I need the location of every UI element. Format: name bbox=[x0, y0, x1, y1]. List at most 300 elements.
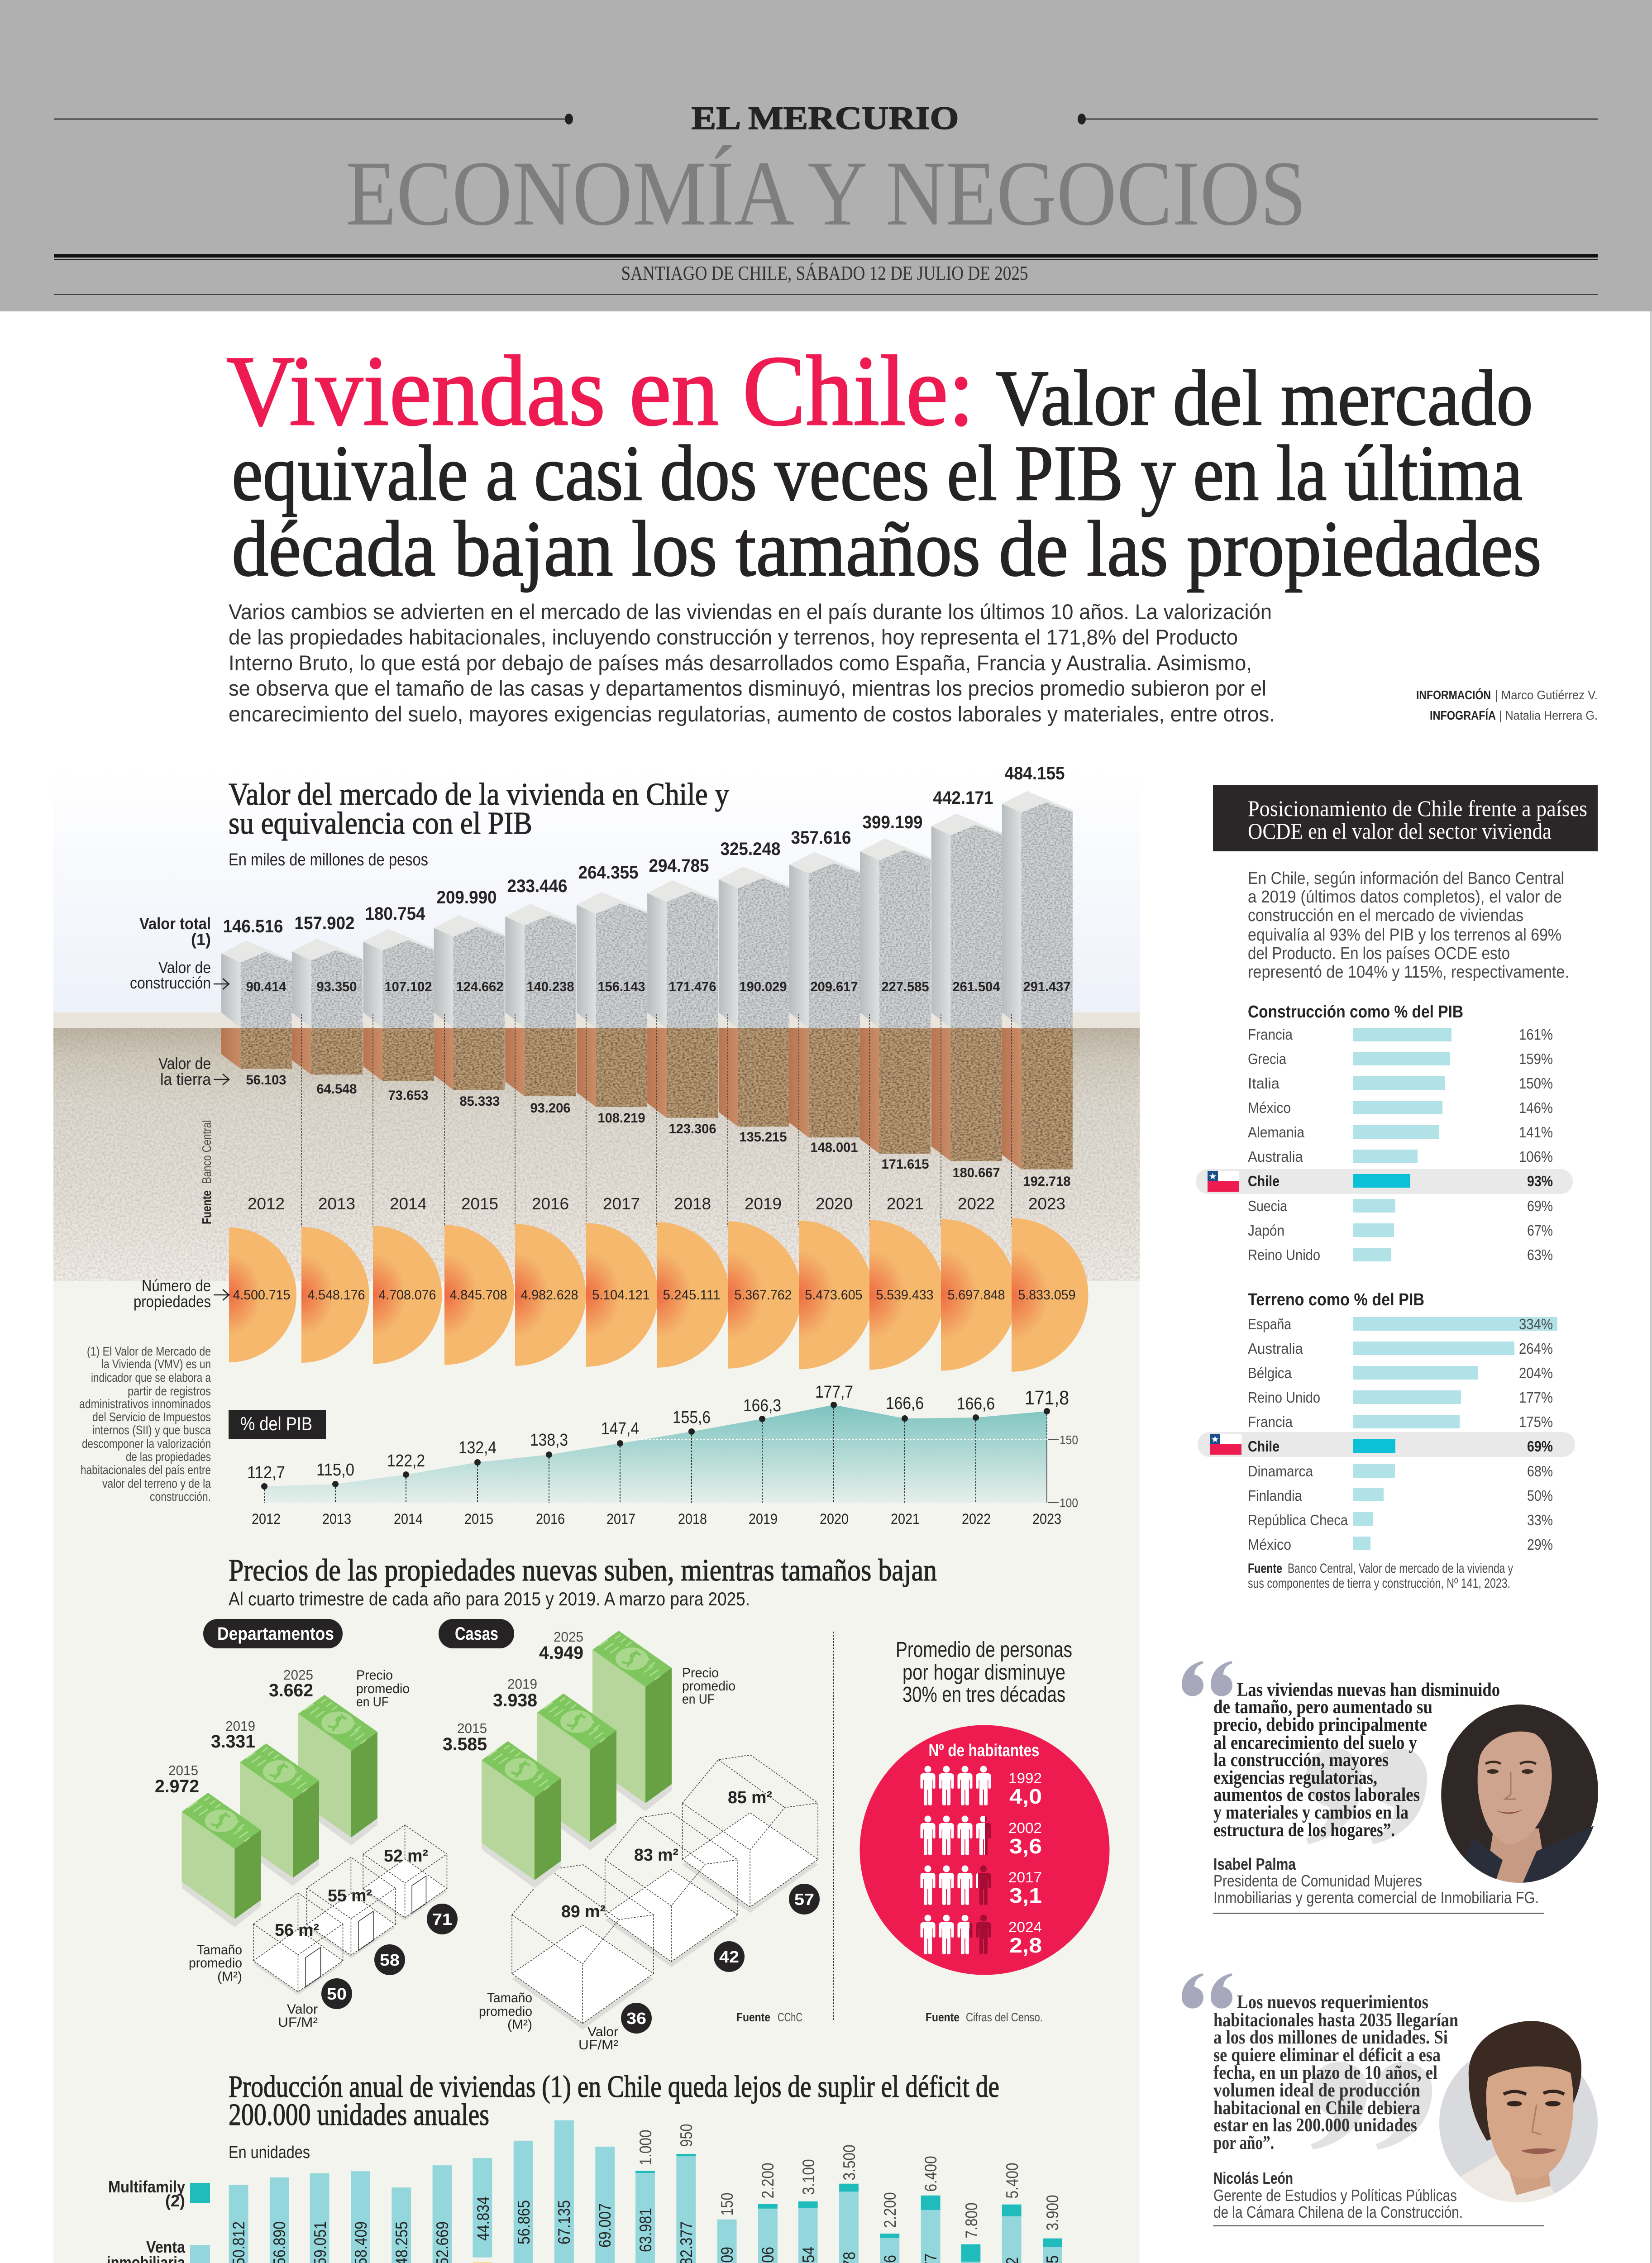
section title: Producción anual de viviendas (1) en Chile queda lejos de suplir el déficit de bbox=[229, 2069, 999, 2104]
quote author: Gerente de Estudios y Políticas Públicas bbox=[1213, 2186, 1457, 2205]
footnote: la Vivienda (VMV) es un bbox=[101, 1357, 211, 1371]
apartment price stacks bbox=[182, 1695, 377, 1927]
property counts: 4.982.628 bbox=[520, 1288, 578, 1303]
year labels: 2023 bbox=[1028, 1194, 1065, 1213]
construction values: 291.437 bbox=[1023, 979, 1071, 994]
bar list: land as % of GDP: Dinamarca bbox=[1248, 1463, 1313, 1480]
people 1992 bbox=[921, 1766, 991, 1805]
axis years: 2021 bbox=[891, 1511, 920, 1527]
total values: 264.355 bbox=[578, 863, 638, 883]
quote text: se quiere eliminar el déficit a esa bbox=[1213, 2045, 1441, 2066]
portrait: Isabel Palma bbox=[1441, 1704, 1598, 1887]
bar list: land as % of GDP: Reino Unido bbox=[1248, 1389, 1320, 1406]
data labels: 177,7 bbox=[815, 1383, 853, 1402]
people 2017 bbox=[921, 1866, 991, 1905]
multifamily values: 3.100 bbox=[799, 2159, 818, 2195]
chart: annual housing production bbox=[80, 2069, 1063, 2263]
multifamily values: 150 bbox=[718, 2192, 736, 2216]
total values: 484.155 bbox=[1005, 764, 1065, 783]
property counts: 5.245.111 bbox=[663, 1288, 721, 1303]
year labels: 2019 bbox=[745, 1194, 782, 1213]
panel intro text: del Producto. En los países OCDE esto bbox=[1248, 944, 1510, 963]
row labels: Valor de bbox=[158, 958, 211, 977]
section subtitle: Al cuarto trimestre de cada año para 2015 y 2019. A marzo para 2025. bbox=[229, 1588, 750, 1609]
household size circle: Nº de habitantes bbox=[929, 1741, 1039, 1760]
data labels: 138,3 bbox=[530, 1431, 568, 1450]
land values: 180.667 bbox=[952, 1165, 1000, 1180]
panel source: sus componentes de tierra y construcción, Nº 141, 2023. bbox=[1248, 1576, 1510, 1591]
land values: 56.103 bbox=[246, 1073, 286, 1088]
bar list: construction as % of GDP: Italia bbox=[1248, 1075, 1280, 1092]
quote text: volumen ideal de producción bbox=[1213, 2080, 1420, 2101]
household values: 3,6 bbox=[1009, 1834, 1042, 1858]
multifamily values: 3.900 bbox=[1043, 2195, 1062, 2230]
date line: SANTIAGO DE CHILE, SÁBADO 12 DE JULIO DE 2025 bbox=[621, 262, 1028, 284]
bar list: land as % of GDP: 334% bbox=[1519, 1316, 1553, 1332]
pill: houses: Casas bbox=[455, 1624, 498, 1644]
bar list: land as % of GDP: Francia bbox=[1248, 1413, 1293, 1430]
callout labels: Tamaño bbox=[197, 1943, 242, 1957]
row labels: Valor de bbox=[158, 1054, 211, 1073]
UF per m2 badges: 71 bbox=[432, 1910, 452, 1929]
price labels: 2015 bbox=[168, 1762, 198, 1778]
intro paragraph: de las propiedades habitacionales, incluyendo construcción y terrenos, hoy representa el 171,8% del Producto bbox=[229, 625, 1238, 649]
bar list: land as % of GDP: Bélgica bbox=[1248, 1365, 1292, 1381]
section title: 200.000 unidades anuales bbox=[229, 2097, 489, 2132]
property counts: 4.845.708 bbox=[450, 1288, 507, 1303]
quote text: por año”. bbox=[1213, 2133, 1274, 2153]
bar list: construction as % of GDP: 67% bbox=[1527, 1222, 1553, 1239]
source: Banco Central bbox=[200, 1120, 214, 1184]
main title: década bajan los tamaños de las propiedades bbox=[232, 505, 1542, 592]
quote text: habitacional en Chile debiera bbox=[1213, 2098, 1420, 2119]
household values: 1992 bbox=[1008, 1770, 1042, 1786]
bars: construction and land bbox=[221, 791, 1073, 1170]
price labels: 2015 bbox=[457, 1720, 487, 1736]
main title bbox=[226, 335, 1542, 592]
intro paragraph: encarecimiento del suelo, mayores exigencias regulatorias, aumento de costos laborales y materiales, entre otros. bbox=[229, 702, 1275, 726]
construction values: 124.662 bbox=[456, 979, 503, 994]
data labels: 147,4 bbox=[601, 1419, 639, 1438]
size labels: 83 m² bbox=[634, 1846, 678, 1865]
year labels: 2021 bbox=[887, 1194, 924, 1213]
legend: (2) bbox=[165, 2191, 185, 2210]
dashed year guides bbox=[301, 1014, 1012, 1227]
axis years: 2014 bbox=[394, 1511, 423, 1527]
callout labels: en UF bbox=[682, 1692, 715, 1707]
footnote: construcción. bbox=[150, 1490, 211, 1504]
quote text bbox=[1213, 1992, 1458, 2153]
sale values: 44.834 bbox=[474, 2196, 492, 2241]
bar list: construction as % of GDP: 150% bbox=[1519, 1075, 1553, 1092]
portrait: Nicolás León bbox=[1439, 2021, 1598, 2218]
bar list: construction as % of GDP: Japón bbox=[1248, 1222, 1284, 1239]
source bbox=[200, 1120, 214, 1224]
intro paragraph: se observa que el tamaño de las casas y departamentos disminuyó, mientras los precios promedio subieron por el bbox=[229, 676, 1266, 700]
total values: 233.446 bbox=[507, 876, 568, 896]
year labels: 2017 bbox=[603, 1194, 640, 1213]
quote: Isabel Palma bbox=[1182, 1661, 1598, 1913]
year labels: 2016 bbox=[532, 1194, 569, 1213]
household values bbox=[1008, 1770, 1042, 1957]
land values: 123.306 bbox=[669, 1122, 716, 1136]
UF per m2 badges: 58 bbox=[380, 1951, 400, 1969]
bar list: land as % of GDP: 29% bbox=[1527, 1536, 1553, 1553]
source: census: Fuente bbox=[926, 2010, 960, 2024]
quote: Nicolás León bbox=[1182, 1973, 1598, 2226]
row labels: construcción bbox=[130, 974, 211, 992]
construction values: 171.476 bbox=[669, 979, 716, 994]
footnote: del Servicio de Impuestos bbox=[92, 1410, 211, 1424]
total values: 146.516 bbox=[223, 917, 283, 936]
land values: 192.718 bbox=[1023, 1174, 1071, 1189]
construction values: 93.350 bbox=[317, 979, 357, 994]
callout labels: UF/M² bbox=[578, 2038, 618, 2053]
property counts: 5.367.762 bbox=[734, 1288, 792, 1303]
size labels: 52 m² bbox=[384, 1847, 428, 1866]
bar list: land as % of GDP: México bbox=[1248, 1536, 1291, 1553]
axis years: 2015 bbox=[464, 1511, 493, 1527]
panel heading: OCDE en el valor del sector vivienda bbox=[1248, 818, 1552, 844]
bar list: land as % of GDP: Finlandia bbox=[1248, 1487, 1303, 1504]
year labels: 2022 bbox=[958, 1194, 995, 1213]
year labels: 2015 bbox=[461, 1194, 498, 1213]
footnote: descomponer la valorización bbox=[82, 1437, 211, 1451]
footnote: partir de registros bbox=[128, 1384, 211, 1398]
property counts: 5.833.059 bbox=[1018, 1288, 1075, 1303]
arrows bbox=[214, 979, 229, 1300]
pill: apartments: Departamentos bbox=[217, 1624, 334, 1644]
footnote: habitacionales del país entre bbox=[81, 1463, 211, 1477]
axis years: 2013 bbox=[322, 1511, 351, 1527]
callout labels: Precio bbox=[356, 1668, 393, 1683]
construction values: 156.143 bbox=[597, 979, 645, 994]
credits: INFORMACIÓN bbox=[1416, 688, 1491, 702]
multifamily values: 2.200 bbox=[881, 2192, 899, 2228]
backdrop: horizon band bbox=[53, 1012, 1140, 1028]
bar list: construction as % of GDP: Suecia bbox=[1248, 1198, 1288, 1214]
multifamily values bbox=[636, 2124, 1062, 2239]
quote text: habitacionales hasta 2035 llegarían bbox=[1213, 2010, 1458, 2031]
UF per m2 badges: 57 bbox=[794, 1890, 814, 1909]
unit note: En unidades bbox=[229, 2143, 310, 2162]
data points bbox=[261, 1402, 1050, 1490]
price labels: 3.662 bbox=[269, 1681, 313, 1700]
price labels: 2025 bbox=[283, 1667, 313, 1683]
bar list: construction as % of GDP: 63% bbox=[1527, 1246, 1553, 1263]
size labels: 56 m² bbox=[275, 1921, 319, 1940]
source: prices bbox=[736, 2010, 802, 2024]
axis years: 2018 bbox=[678, 1511, 707, 1527]
quote author: Nicolás León bbox=[1213, 2169, 1293, 2187]
construction values bbox=[246, 979, 1071, 994]
unit note: En miles de millones de pesos bbox=[229, 850, 428, 869]
household size heading: Promedio de personas bbox=[896, 1638, 1072, 1662]
bar list: land as % of GDP: España bbox=[1248, 1316, 1292, 1332]
property counts: 4.708.076 bbox=[378, 1288, 436, 1303]
household values: 3,1 bbox=[1009, 1884, 1042, 1907]
bar list: construction as % of GDP: 159% bbox=[1519, 1050, 1553, 1067]
source: census bbox=[926, 2010, 1043, 2024]
footnote: valor del terreno y de la bbox=[102, 1476, 211, 1490]
axis bbox=[1047, 1433, 1078, 1510]
year labels: 2018 bbox=[674, 1194, 711, 1213]
household size heading: por hogar disminuye bbox=[902, 1661, 1065, 1685]
sale values bbox=[229, 2196, 1062, 2263]
price labels: 4.949 bbox=[539, 1643, 583, 1663]
bar list: land as % of GDP: República Checa bbox=[1248, 1512, 1348, 1528]
chart: % of GDP bbox=[229, 1383, 1078, 1527]
callout labels: Valor bbox=[587, 2024, 618, 2039]
bar list: construction as % of GDP: 93% bbox=[1527, 1173, 1553, 1189]
data labels bbox=[247, 1383, 1069, 1482]
footnote: internos (SII) y que busca bbox=[92, 1423, 211, 1437]
pill: apartments bbox=[203, 1619, 343, 1648]
source: prices: CChC bbox=[778, 2010, 802, 2024]
bar list: land as % of GDP: 264% bbox=[1519, 1340, 1553, 1357]
intro paragraph: Interno Bruto, lo que está por debajo de países más desarrollados como España, Francia y Australia. Asimismo, bbox=[229, 651, 1252, 675]
bar list: construction as % of GDP: Francia bbox=[1248, 1026, 1293, 1043]
backdrop: ground bbox=[53, 1028, 1140, 1281]
data labels: 122,2 bbox=[387, 1451, 425, 1470]
price labels bbox=[155, 1629, 583, 1796]
household size circle bbox=[860, 1725, 1110, 1975]
bar list: construction as % of GDP: Alemania bbox=[1248, 1124, 1305, 1141]
bar list: construction as % of GDP: Grecia bbox=[1248, 1050, 1287, 1067]
quote author bbox=[1213, 2169, 1463, 2221]
property counts: 5.697.848 bbox=[948, 1288, 1005, 1303]
construction values: 227.585 bbox=[882, 979, 929, 994]
sale values: 69.007 bbox=[596, 2203, 614, 2248]
quote text: estructura de los hogares”. bbox=[1213, 1820, 1395, 1841]
house size boxes bbox=[512, 1755, 818, 2029]
bar list: construction as % of GDP: 106% bbox=[1519, 1148, 1553, 1165]
section title: Precios de las propiedades nuevas suben, mientras tamaños bajan bbox=[229, 1553, 937, 1587]
data labels: 155,6 bbox=[673, 1408, 711, 1427]
total values bbox=[223, 764, 1065, 936]
quote author: de la Cámara Chilena de la Construcción. bbox=[1213, 2203, 1463, 2221]
multifamily values: 3.500 bbox=[840, 2144, 859, 2181]
footnote: administrativos innominados bbox=[79, 1397, 211, 1411]
property counts: 5.104.121 bbox=[592, 1288, 650, 1303]
footnote: de las propiedades bbox=[126, 1450, 211, 1464]
quote author: Isabel Palma bbox=[1213, 1855, 1296, 1873]
panel source bbox=[1248, 1561, 1513, 1591]
data labels: 132,4 bbox=[458, 1438, 497, 1457]
row labels: propiedades bbox=[134, 1292, 211, 1311]
footnote: indicador que se elabora a bbox=[91, 1370, 211, 1385]
section title bbox=[229, 2069, 999, 2132]
multifamily values: 950 bbox=[677, 2124, 696, 2147]
panel intro text bbox=[1248, 869, 1569, 982]
callout labels: UF/M² bbox=[278, 2015, 318, 2030]
construction values: 209.617 bbox=[810, 979, 858, 994]
main title: Viviendas en Chile: bbox=[226, 335, 974, 447]
price labels: 2019 bbox=[225, 1718, 255, 1734]
UF per m2 badges: 50 bbox=[327, 1985, 347, 2003]
credits: | Marco Gutiérrez V. bbox=[1495, 688, 1598, 702]
row labels: Valor total bbox=[139, 914, 211, 933]
quote text: estar en las 200.000 unidades bbox=[1213, 2115, 1417, 2136]
panel heading bbox=[1213, 785, 1598, 851]
household values: 2017 bbox=[1008, 1869, 1042, 1886]
row labels: la tierra bbox=[160, 1070, 211, 1089]
bar list: land as % of GDP: Australia bbox=[1248, 1340, 1303, 1357]
panel intro text: En Chile, según información del Banco Central bbox=[1248, 869, 1564, 888]
callout labels: Precio bbox=[682, 1666, 719, 1681]
property counts: 5.539.433 bbox=[876, 1288, 933, 1303]
backdrop: sky bbox=[53, 769, 1140, 1012]
quote text: precio, debido principalmente bbox=[1213, 1714, 1427, 1735]
bar list: land as % of GDP: 50% bbox=[1527, 1487, 1553, 1504]
data labels: 171,8 bbox=[1025, 1387, 1069, 1409]
total values: 399.199 bbox=[863, 812, 922, 832]
land values: 148.001 bbox=[810, 1140, 858, 1155]
year labels: 2012 bbox=[248, 1194, 285, 1213]
quote text: y materiales y cambios en la bbox=[1213, 1802, 1408, 1823]
axis years: 2020 bbox=[820, 1511, 849, 1527]
multifamily values: 1.000 bbox=[636, 2130, 655, 2165]
bar list: land as % of GDP bbox=[1198, 1290, 1575, 1553]
chart title: su equivalencia con el PIB bbox=[229, 806, 532, 841]
callout labels: promedio bbox=[356, 1681, 410, 1696]
bar list: land as % of GDP: 69% bbox=[1527, 1438, 1553, 1455]
sale values: 56.865 bbox=[515, 2200, 533, 2244]
total values: 442.171 bbox=[933, 788, 993, 808]
bar list: land as % of GDP: Chile bbox=[1248, 1438, 1280, 1455]
data labels: 166,6 bbox=[957, 1394, 995, 1413]
callout labels: Tamaño bbox=[487, 1991, 532, 2005]
price labels: 2.972 bbox=[155, 1776, 199, 1796]
callout labels: (M²) bbox=[507, 2017, 532, 2032]
axis years: 2017 bbox=[606, 1511, 635, 1527]
total values: 209.990 bbox=[436, 888, 497, 907]
credits bbox=[1416, 688, 1598, 722]
callout labels bbox=[189, 1666, 735, 2053]
masthead band bbox=[0, 0, 1652, 311]
people 2024 bbox=[921, 1914, 991, 1954]
total values: 180.754 bbox=[365, 904, 425, 924]
chart title: Valor del mercado de la vivienda en Chile y bbox=[229, 777, 729, 812]
household values: 2,8 bbox=[1009, 1934, 1042, 1957]
newspaper name: EL MERCURIO bbox=[692, 100, 959, 136]
main title: Valor del mercado bbox=[996, 354, 1533, 442]
total values: 157.902 bbox=[294, 913, 355, 933]
quote text: Las viviendas nuevas han disminuido bbox=[1237, 1680, 1500, 1700]
total values: 357.616 bbox=[791, 828, 851, 848]
panel source: Fuente bbox=[1248, 1561, 1282, 1576]
UF per m2 badges: 42 bbox=[719, 1948, 739, 1966]
price labels: 2025 bbox=[554, 1629, 583, 1645]
total values: 325.248 bbox=[721, 839, 780, 859]
bar list: construction as % of GDP: 146% bbox=[1519, 1099, 1553, 1116]
bar list: construction as % of GDP: Reino Unido bbox=[1248, 1246, 1320, 1263]
land values: 93.206 bbox=[530, 1101, 570, 1116]
quote text: al encarecimiento del suelo y bbox=[1213, 1733, 1417, 1753]
credits: | Natalia Herrera G. bbox=[1499, 708, 1598, 722]
land values: 108.219 bbox=[597, 1111, 645, 1126]
section name: ECONOMÍA Y NEGOCIOS bbox=[346, 142, 1306, 245]
household values: 4,0 bbox=[1009, 1785, 1042, 1808]
bar list: construction as % of GDP: 161% bbox=[1519, 1026, 1553, 1043]
property counts: 4.548.176 bbox=[308, 1288, 365, 1303]
row labels: Número de bbox=[142, 1276, 211, 1295]
pill: houses bbox=[439, 1619, 514, 1648]
construction values: 107.102 bbox=[385, 979, 432, 994]
badge: % del PIB bbox=[240, 1413, 312, 1434]
multifamily values: 6.400 bbox=[921, 2156, 940, 2191]
intro paragraph bbox=[229, 600, 1275, 726]
price labels: 2019 bbox=[507, 1676, 537, 1692]
footnote bbox=[79, 1344, 211, 1504]
household size heading: 30% en tres décadas bbox=[902, 1683, 1065, 1707]
construction values: 140.238 bbox=[527, 979, 574, 994]
callout labels: promedio bbox=[189, 1956, 242, 1971]
land values: 171.615 bbox=[882, 1157, 929, 1172]
axis years: 2012 bbox=[252, 1511, 281, 1527]
backdrop: light panel bbox=[53, 1281, 1140, 2263]
area bbox=[264, 1405, 1047, 1503]
data labels: 166,3 bbox=[743, 1396, 781, 1415]
footnote: (1) El Valor de Mercado de bbox=[87, 1344, 211, 1358]
land values: 135.215 bbox=[740, 1130, 787, 1145]
row labels bbox=[130, 914, 211, 1311]
apartment size boxes bbox=[253, 1825, 447, 1995]
total values: 294.785 bbox=[649, 856, 709, 876]
panel intro text: a 2019 (últimos datos completos), el valor de bbox=[1248, 888, 1562, 907]
bar list: land as % of GDP: 33% bbox=[1527, 1512, 1553, 1528]
legend bbox=[87, 2177, 229, 2263]
price labels: 3.938 bbox=[493, 1690, 537, 1710]
sale values: 63.981 bbox=[636, 2208, 655, 2252]
property counts: 5.473.605 bbox=[805, 1288, 863, 1303]
source: prices: Fuente bbox=[736, 2010, 770, 2024]
axis years bbox=[252, 1511, 1061, 1527]
chart title bbox=[229, 777, 729, 841]
bar list: land as % of GDP: 204% bbox=[1519, 1365, 1553, 1381]
year labels: 2013 bbox=[318, 1194, 355, 1213]
axis: 150 bbox=[1060, 1433, 1078, 1447]
land values: 85.333 bbox=[460, 1094, 500, 1109]
bar list: construction as % of GDP: Australia bbox=[1248, 1148, 1303, 1165]
multifamily values: 2.200 bbox=[759, 2163, 777, 2199]
quote text: exigencias regulatorias, bbox=[1213, 1767, 1377, 1788]
quote text: la construcción, mayores bbox=[1213, 1750, 1389, 1771]
size labels: 55 m² bbox=[328, 1886, 372, 1905]
bar list: construction as % of GDP: México bbox=[1248, 1099, 1291, 1116]
land values: 73.653 bbox=[388, 1088, 428, 1103]
chart: housing market value bbox=[79, 764, 1089, 1504]
quote text: de tamaño, pero aumentado su bbox=[1213, 1697, 1432, 1718]
UF per m2 badges bbox=[321, 1884, 820, 2034]
source: Fuente bbox=[200, 1190, 214, 1224]
property counts bbox=[233, 1288, 1075, 1303]
source: census: Cifras del Censo. bbox=[966, 2010, 1043, 2024]
panel intro text: representó de 104% y 115%, respectivamente. bbox=[1248, 963, 1569, 982]
quote author: Inmobiliarias y gerenta comercial de Inmobiliaria FG. bbox=[1213, 1888, 1539, 1907]
legend: Venta bbox=[146, 2238, 186, 2256]
callout labels: en UF bbox=[356, 1695, 389, 1709]
callout labels: promedio bbox=[682, 1679, 735, 1694]
data labels: 166,6 bbox=[886, 1394, 924, 1413]
construction values: 261.504 bbox=[952, 979, 1000, 994]
bar list: construction as % of GDP bbox=[1196, 1003, 1573, 1263]
quote author bbox=[1213, 1855, 1539, 1907]
axis: 100 bbox=[1060, 1496, 1078, 1510]
bar list: land as % of GDP: Terreno como % del PIB bbox=[1248, 1290, 1424, 1309]
bar list: construction as % of GDP: Chile bbox=[1248, 1173, 1280, 1189]
size labels bbox=[275, 1788, 772, 1940]
